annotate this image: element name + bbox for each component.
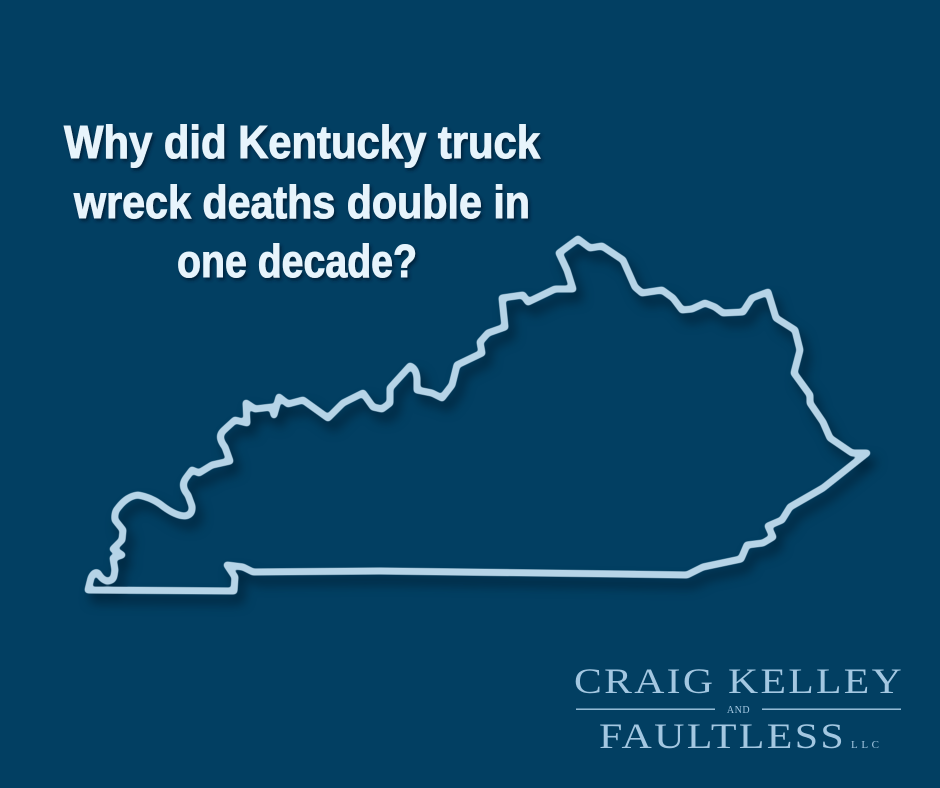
logo suffix LLC: LLC [851, 739, 879, 751]
logo: Craig Kelley and Faultless LLC [574, 661, 904, 756]
title: Why did Kentucky truck [64, 116, 540, 168]
title [64, 116, 540, 287]
map: Kentucky state outline [88, 239, 867, 591]
logo line: firm name bottom: FAULTLESS [599, 716, 846, 756]
logo line: firm name top: CRAIG KELLEY [574, 661, 904, 701]
title: wreck deaths double in [73, 176, 530, 228]
title: one decade? [177, 235, 417, 287]
logo divider with AND: AND [727, 705, 750, 716]
